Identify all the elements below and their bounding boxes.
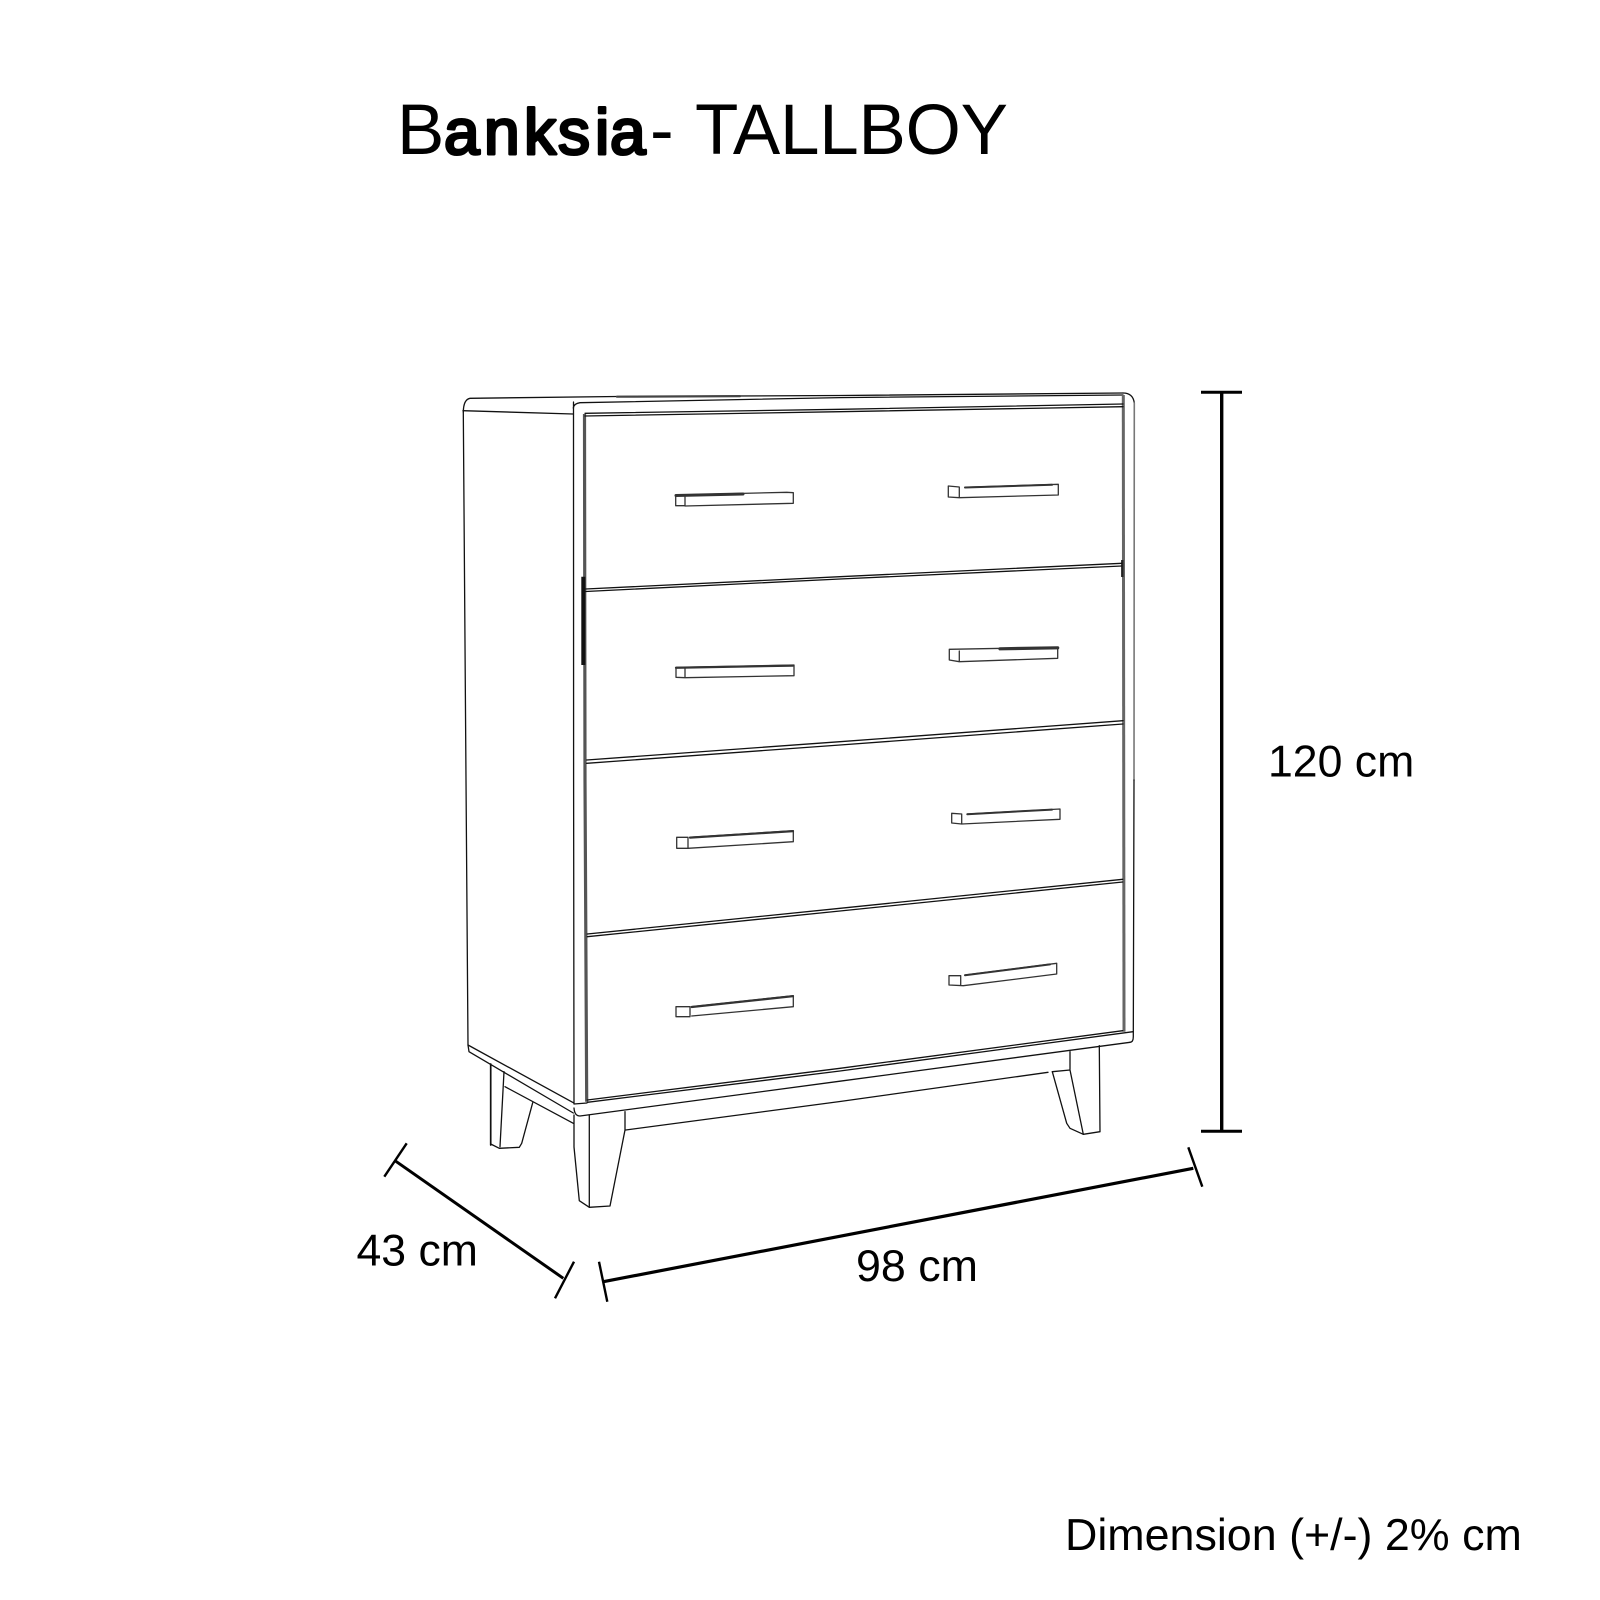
drawer handle 4 left [676, 996, 793, 1017]
drawer dividers [585, 404, 1133, 1102]
front right leg [1052, 1046, 1100, 1134]
title: - [650, 91, 674, 170]
tolerance note: Dimension (+/-) 2% cm [1065, 1510, 1522, 1560]
height label: 120 cm [1268, 738, 1414, 786]
base rail [574, 1042, 1130, 1130]
width label: 98 cm [856, 1241, 978, 1291]
drawer handle 2 left [676, 665, 794, 678]
title: B [397, 91, 444, 170]
drawer handle 3 right [952, 809, 1060, 824]
drawer handle 4 right [949, 963, 1057, 986]
dimension line: height [1201, 392, 1242, 1131]
drawer handle 3 left [677, 831, 793, 848]
dimension line: width [599, 1147, 1202, 1302]
cabinet side panel [463, 393, 1123, 1123]
title [397, 91, 1008, 170]
drawer handle 1 left [676, 492, 793, 506]
title: anksia [444, 96, 646, 168]
tallboy line drawing [463, 393, 1134, 1207]
dimension line: depth [384, 1143, 574, 1298]
depth label: 43 cm [356, 1226, 478, 1276]
drawer handle 1 right [948, 484, 1058, 498]
cabinet front frame [573, 393, 1134, 1104]
title: TALLBOY [695, 91, 1008, 170]
front corner leg [574, 1112, 625, 1207]
back left leg [491, 1064, 533, 1148]
drawer handle 2 right [949, 647, 1058, 662]
